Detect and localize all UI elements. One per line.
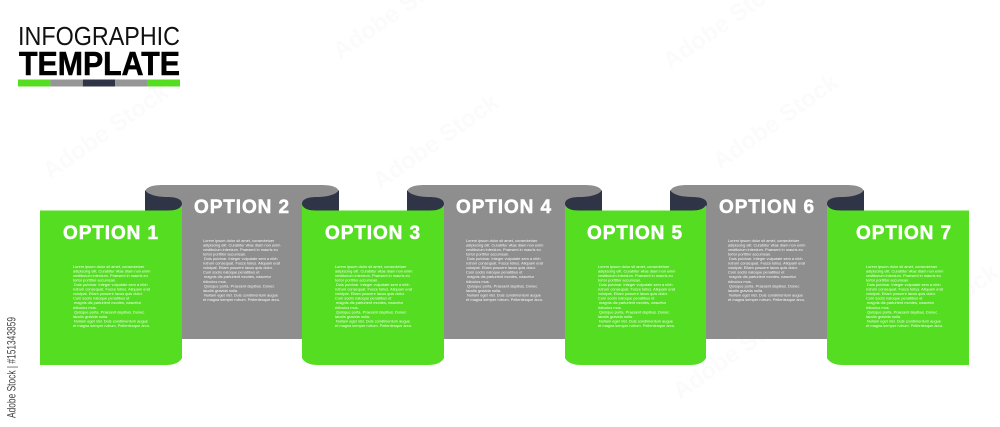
body text: Quisque porta. Praesent dapibus. Donec xyxy=(467,283,537,288)
body text: ridiculus mus. xyxy=(598,305,622,310)
body text: Nullam eget nisl. Duis condimentum augue xyxy=(729,292,803,297)
body text: Duis pulvinar. Integer vulputate sem a nibh xyxy=(204,256,278,261)
body text: ridiculus mus. xyxy=(73,305,97,310)
body text: ridiculus mus. xyxy=(466,279,490,284)
body text: Duis pulvinar. Integer vulputate sem a nibh xyxy=(599,282,673,287)
body text: iaculis gravida nulla. xyxy=(598,314,633,319)
right roll xyxy=(302,190,339,211)
heading: OPTION 1 xyxy=(63,223,159,244)
body text: Quisque porta. Praesent dapibus. Donec xyxy=(867,309,937,314)
heading: OPTION 2 xyxy=(194,197,290,218)
body text: tortor porttitor accumsan. xyxy=(728,252,771,257)
body text: iaculis gravida nulla. xyxy=(728,288,763,293)
body text: volutpat. Etiam posuere lacus quis dolor. xyxy=(73,291,143,296)
body text: Duis pulvinar. Integer vulputate sem a nibh xyxy=(729,256,803,261)
panel: option 1 xyxy=(40,205,182,365)
panel: option 2 xyxy=(145,185,339,339)
body text: Lorem ipsum dolor sit amet, consectetuer xyxy=(203,238,275,243)
body text: tortor porttitor accumsan. xyxy=(73,278,116,283)
body text: tortor porttitor accumsan. xyxy=(203,252,246,257)
body text: vestibulum interdum. Praesent in mauris eu xyxy=(335,273,410,278)
body text: et magna semper rutrum. Pellentesque arcu. xyxy=(866,323,943,328)
body text: ridiculus mus. xyxy=(203,279,227,284)
heading: OPTION 5 xyxy=(587,223,683,244)
body text: Cum sociis natoque penatibus et xyxy=(335,296,392,301)
panel: option 5 xyxy=(565,205,706,365)
body text: Nullam eget nisl. Duis condimentum augue xyxy=(467,292,541,297)
body text: tortor porttitor accumsan. xyxy=(335,278,378,283)
right roll xyxy=(827,190,864,211)
green sheet xyxy=(40,205,182,365)
body text: iaculis gravida nulla. xyxy=(866,314,901,319)
heading: OPTION 7 xyxy=(856,223,952,244)
body text: vestibulum interdum. Praesent in mauris eu xyxy=(73,273,148,278)
body text: Nullam eget nisl. Duis condimentum augue xyxy=(336,318,410,323)
body text: Nullam eget nisl. Duis condimentum augue xyxy=(204,292,278,297)
body text: adipiscing elit. Curabitur vitae diam non enim xyxy=(728,243,805,248)
body text: magnis dis parturient montes, nascetur xyxy=(729,274,797,279)
body text: Cum sociis natoque penatibus et xyxy=(466,270,523,275)
body text: Cum sociis natoque penatibus et xyxy=(203,270,260,275)
body text: magnis dis parturient montes, nascetur xyxy=(867,300,935,305)
heading: OPTION 4 xyxy=(456,197,552,218)
body text: ridiculus mus. xyxy=(728,279,752,284)
body text: Duis pulvinar. Integer vulputate sem a nibh xyxy=(74,282,148,287)
body text: adipiscing elit. Curabitur vitae diam non enim xyxy=(598,269,675,274)
body text: et magna semper rutrum. Pellentesque arcu. xyxy=(598,323,675,328)
heading line: TEMPLATE: TEMPLATE xyxy=(19,45,180,82)
stock id label: Adobe Stock | #151343859 xyxy=(4,317,18,418)
body text: Nullam eget nisl. Duis condimentum augue xyxy=(599,318,673,323)
right roll xyxy=(565,190,602,211)
body text: Quisque porta. Praesent dapibus. Donec xyxy=(204,283,274,288)
body text: volutpat. Etiam posuere lacus quis dolor. xyxy=(598,291,668,296)
body text: rutrum consequat. Fusce tellus. Aliquam erat xyxy=(728,261,806,266)
body text: et magna semper rutrum. Pellentesque arcu. xyxy=(728,297,805,302)
body text: magnis dis parturient montes, nascetur xyxy=(336,300,404,305)
panel: option 3 xyxy=(302,205,444,365)
body text: Cum sociis natoque penatibus et xyxy=(73,296,130,301)
body text: Quisque porta. Praesent dapibus. Donec xyxy=(336,309,406,314)
body text: et magna semper rutrum. Pellentesque arcu. xyxy=(466,297,543,302)
heading: OPTION 6 xyxy=(719,197,815,218)
green sheet xyxy=(302,205,444,365)
body text: volutpat. Etiam posuere lacus quis dolor. xyxy=(866,291,936,296)
body text: magnis dis parturient montes, nascetur xyxy=(204,274,272,279)
body text: Quisque porta. Praesent dapibus. Donec xyxy=(729,283,799,288)
gray sheet xyxy=(670,185,864,339)
body text: Cum sociis natoque penatibus et xyxy=(598,296,655,301)
body text: vestibulum interdum. Praesent in mauris eu xyxy=(466,247,541,252)
body text: tortor porttitor accumsan. xyxy=(466,252,509,257)
body text: rutrum consequat. Fusce tellus. Aliquam erat xyxy=(73,287,151,292)
body text: magnis dis parturient montes, nascetur xyxy=(467,274,535,279)
body text: et magna semper rutrum. Pellentesque arcu. xyxy=(203,297,280,302)
body text: magnis dis parturient montes, nascetur xyxy=(74,300,142,305)
body text: adipiscing elit. Curabitur vitae diam non enim xyxy=(73,269,150,274)
body text: Nullam eget nisl. Duis condimentum augue xyxy=(867,318,941,323)
body text: iaculis gravida nulla. xyxy=(73,314,108,319)
body text: Cum sociis natoque penatibus et xyxy=(728,270,785,275)
gray sheet xyxy=(145,185,339,339)
body text: vestibulum interdum. Praesent in mauris eu xyxy=(203,247,278,252)
green sheet xyxy=(827,205,969,365)
body text: iaculis gravida nulla. xyxy=(203,288,238,293)
body text: vestibulum interdum. Praesent in mauris eu xyxy=(866,273,941,278)
body text: Lorem ipsum dolor sit amet, consectetuer xyxy=(466,238,538,243)
body text: Quisque porta. Praesent dapibus. Donec xyxy=(599,309,669,314)
panel: option 6 xyxy=(670,185,864,339)
body text: Lorem ipsum dolor sit amet, consectetuer xyxy=(598,264,670,269)
body text: Nullam eget nisl. Duis condimentum augue xyxy=(74,318,148,323)
body text: rutrum consequat. Fusce tellus. Aliquam erat xyxy=(335,287,413,292)
body text: rutrum consequat. Fusce tellus. Aliquam erat xyxy=(203,261,281,266)
body text: iaculis gravida nulla. xyxy=(466,288,501,293)
body text: Cum sociis natoque penatibus et xyxy=(866,296,923,301)
body text: Duis pulvinar. Integer vulputate sem a nibh xyxy=(867,282,941,287)
body text: adipiscing elit. Curabitur vitae diam non enim xyxy=(866,269,943,274)
body text: iaculis gravida nulla. xyxy=(335,314,370,319)
body text: Duis pulvinar. Integer vulputate sem a nibh xyxy=(336,282,410,287)
body text: rutrum consequat. Fusce tellus. Aliquam erat xyxy=(598,287,676,292)
left roll xyxy=(145,190,182,211)
body text: adipiscing elit. Curabitur vitae diam non enim xyxy=(203,243,280,248)
body text: vestibulum interdum. Praesent in mauris eu xyxy=(598,273,673,278)
body text: ridiculus mus. xyxy=(335,305,359,310)
body text: Lorem ipsum dolor sit amet, consectetuer xyxy=(73,264,145,269)
body text: rutrum consequat. Fusce tellus. Aliquam erat xyxy=(866,287,944,292)
body text: volutpat. Etiam posuere lacus quis dolor. xyxy=(335,291,405,296)
body text: volutpat. Etiam posuere lacus quis dolor. xyxy=(466,265,536,270)
body text: Lorem ipsum dolor sit amet, consectetuer xyxy=(335,264,407,269)
left roll xyxy=(407,190,444,211)
panel: option 4 xyxy=(407,185,602,339)
body text: ridiculus mus. xyxy=(866,305,890,310)
body text: Duis pulvinar. Integer vulputate sem a nibh xyxy=(467,256,541,261)
colour bar xyxy=(18,80,180,86)
gray sheet xyxy=(407,185,602,339)
body text: Lorem ipsum dolor sit amet, consectetuer xyxy=(866,264,938,269)
green sheet xyxy=(565,205,706,365)
title: infographic template xyxy=(18,21,180,86)
body text: vestibulum interdum. Praesent in mauris eu xyxy=(728,247,803,252)
left roll xyxy=(670,190,707,211)
body text: Quisque porta. Praesent dapibus. Donec xyxy=(74,309,144,314)
body text: et magna semper rutrum. Pellentesque arcu. xyxy=(335,323,412,328)
body text: adipiscing elit. Curabitur vitae diam non enim xyxy=(335,269,412,274)
body text: volutpat. Etiam posuere lacus quis dolor. xyxy=(203,265,273,270)
heading: OPTION 3 xyxy=(325,223,421,244)
body text: et magna semper rutrum. Pellentesque arcu. xyxy=(73,323,150,328)
body text: rutrum consequat. Fusce tellus. Aliquam erat xyxy=(466,261,544,266)
body text: adipiscing elit. Curabitur vitae diam non enim xyxy=(466,243,543,248)
body text: tortor porttitor accumsan. xyxy=(866,278,909,283)
body text: Lorem ipsum dolor sit amet, consectetuer xyxy=(728,238,800,243)
body text: tortor porttitor accumsan. xyxy=(598,278,641,283)
heading line: INFOGRAPHIC: INFOGRAPHIC xyxy=(18,21,180,51)
body text: magnis dis parturient montes, nascetur xyxy=(599,300,667,305)
panel: option 7 xyxy=(827,205,969,365)
body text: volutpat. Etiam posuere lacus quis dolor. xyxy=(728,265,798,270)
